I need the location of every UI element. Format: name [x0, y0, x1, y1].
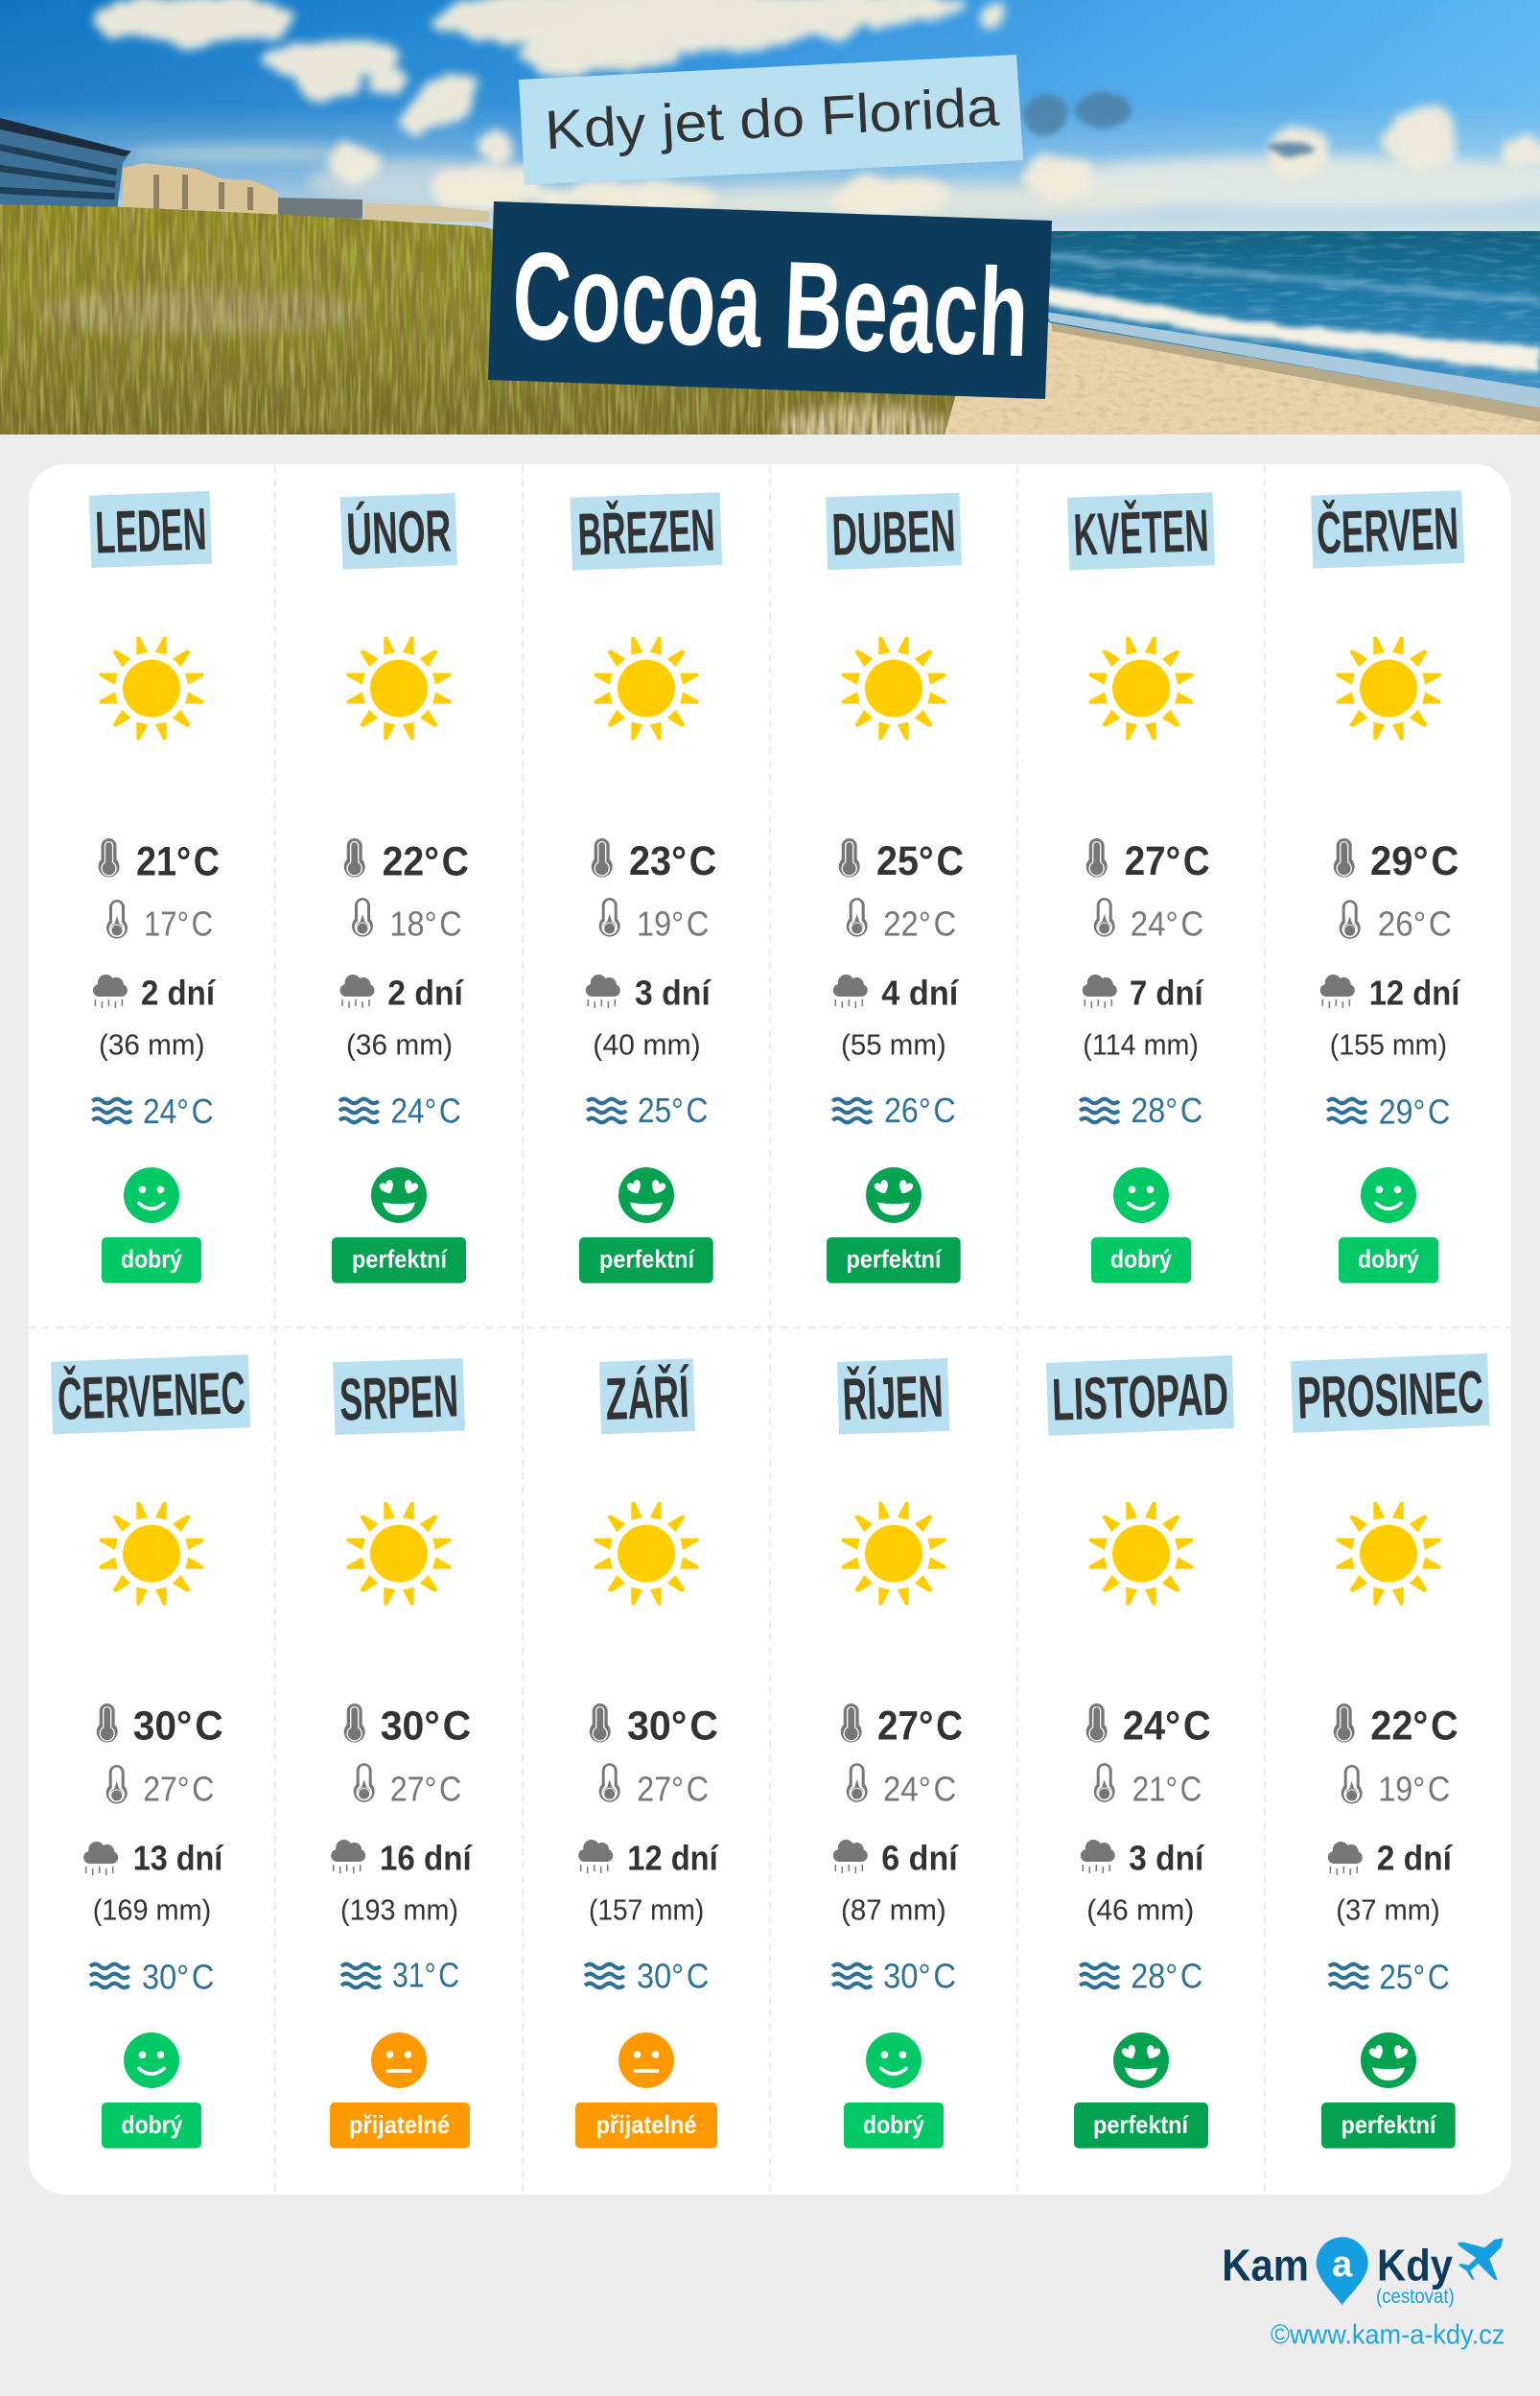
heading: zari: [599, 1358, 695, 1434]
high temperature: [1334, 1703, 1458, 1750]
month: cervenec: [51, 1354, 250, 2149]
badge: good: dobrý: [1110, 1245, 1172, 1274]
rainy days: [833, 1839, 959, 1878]
logo: Kam a Kdy: Kam: [1222, 2241, 1309, 2290]
rainy days: 13 dní: [133, 1839, 223, 1878]
rainy days: 12 dní: [1369, 973, 1460, 1013]
badge: good: [1339, 1237, 1438, 1283]
month: cerven: [1311, 490, 1464, 1283]
icon: sun: [1089, 637, 1193, 740]
water temperature: [585, 1957, 709, 1996]
rainy days: [833, 973, 959, 1013]
rainy days: [339, 973, 464, 1013]
high temperature: [592, 838, 716, 884]
heading: listopad: [1046, 1355, 1234, 1436]
icon: smiley good: [1113, 1167, 1169, 1223]
water temperature: [341, 1956, 459, 1995]
month: rijen: [832, 1358, 963, 2149]
rainfall: (36 mm): [346, 1028, 453, 1061]
rainfall: (155 mm): [1330, 1028, 1447, 1061]
high temperature: [841, 1703, 963, 1750]
high temperature: 25°C: [876, 838, 964, 884]
badge: acceptable: [575, 2102, 717, 2149]
rainfall: (87 mm): [841, 1892, 946, 1926]
month: prosinec: [1291, 1353, 1490, 2149]
icon: smiley acceptable: [618, 2032, 674, 2088]
high temperature: 30°C: [627, 1703, 718, 1750]
month: unor: [332, 493, 469, 1283]
dune grass: [0, 197, 968, 448]
icon: sun: [595, 637, 698, 740]
low temperature: 22°C: [883, 904, 956, 944]
water temperature: [832, 1957, 956, 1996]
high temperature: [344, 838, 469, 884]
icon: smiley perfect: [1113, 2032, 1169, 2088]
heading: brezen: BŘEZEN: [576, 498, 716, 569]
water temperature: [92, 1092, 213, 1131]
low temperature: 27°C: [637, 1769, 709, 1808]
water temperature: 24°C: [391, 1091, 461, 1130]
month: leden: [89, 491, 220, 1283]
high temperature: 27°C: [877, 1703, 963, 1750]
badge: acceptable: přijatelné: [596, 2110, 696, 2139]
heading: srpen: [333, 1358, 465, 1435]
rainy days: 3 dní: [635, 973, 712, 1013]
heading: rijen: [837, 1358, 949, 1435]
rainy days: 7 dní: [1130, 973, 1204, 1013]
high temperature: 22°C: [1370, 1703, 1458, 1750]
low temperature: [1340, 900, 1452, 944]
water temperature: 24°C: [143, 1092, 213, 1131]
heading: brezen: [570, 492, 722, 571]
icon: smiley acceptable: [371, 2032, 427, 2088]
low temperature: [354, 1763, 461, 1808]
icon: map pin: a: [1332, 2244, 1353, 2285]
rainfall: (40 mm): [593, 1028, 701, 1061]
title tag: Kdy jet do Florida: Kdy jet do Florida: [544, 77, 1001, 161]
rainfall: (157 mm): [589, 1892, 704, 1926]
low temperature: [352, 898, 462, 944]
icon: sun: [1337, 637, 1440, 740]
icon: sun: [595, 1502, 698, 1605]
rainy days: 4 dní: [881, 973, 959, 1013]
badge: perfect: [827, 1237, 961, 1283]
surf: [1040, 251, 1540, 372]
water temperature: [1080, 1957, 1202, 1996]
water temperature: 28°C: [1131, 1957, 1202, 1996]
heading: cervenec: ČERVENEC: [57, 1360, 246, 1433]
low temperature: [1094, 1763, 1202, 1808]
low temperature: [599, 898, 709, 944]
badge: perfect: [332, 1237, 466, 1283]
heading: cerven: [1311, 490, 1464, 569]
sand: [945, 322, 1540, 435]
rainy days: [586, 973, 712, 1013]
badge: perfect: [579, 1237, 713, 1283]
month: kveten: [1067, 492, 1215, 1283]
water temperature: 26°C: [884, 1091, 956, 1130]
heading: zari: ZÁŘÍ: [604, 1364, 691, 1433]
rainfall: (193 mm): [340, 1892, 458, 1926]
heading: duben: DUBEN: [830, 498, 957, 569]
high temperature: [1086, 838, 1210, 884]
icon: smiley good: [1361, 1167, 1416, 1223]
icon: smiley perfect: [1361, 2032, 1416, 2088]
low temperature: [599, 1763, 709, 1808]
badge: perfect: perfektní: [1093, 2110, 1189, 2139]
month: zari: [575, 1358, 719, 2149]
rainy days: [1081, 1839, 1204, 1878]
rainy days: [331, 1839, 473, 1878]
water temperature: 29°C: [1379, 1092, 1450, 1132]
low temperature: 21°C: [1132, 1769, 1202, 1808]
water temperature: [1327, 1092, 1450, 1132]
icon: smiley good: [124, 1167, 179, 1223]
high temperature: 24°C: [1123, 1703, 1211, 1750]
month: brezen: [570, 492, 722, 1283]
buildings: [0, 118, 489, 223]
icon: sun: [347, 1502, 451, 1605]
rainy days: 6 dní: [881, 1839, 959, 1878]
sea: [959, 231, 1540, 413]
icon: smiley perfect: [371, 1167, 427, 1223]
water temperature: [587, 1091, 708, 1130]
heading: unor: ÚNOR: [345, 499, 453, 568]
low temperature: [847, 898, 956, 944]
low temperature: 18°C: [389, 904, 462, 944]
low temperature: 26°C: [1378, 904, 1452, 944]
heading: cervenec: [51, 1354, 250, 1434]
high temperature: 23°C: [629, 838, 716, 884]
low temperature: 17°C: [144, 904, 213, 944]
low temperature: 27°C: [390, 1769, 461, 1808]
icon: smiley good: [866, 2032, 922, 2088]
high temperature: 27°C: [1125, 838, 1210, 884]
rainy days: [578, 1839, 719, 1878]
low temperature: 19°C: [1378, 1769, 1450, 1808]
rainy days: [93, 973, 216, 1013]
low temperature: [106, 900, 213, 944]
rainy days: [83, 1839, 223, 1878]
high temperature: [839, 838, 964, 884]
heading: unor: [340, 493, 457, 570]
water temperature: 28°C: [1131, 1091, 1202, 1130]
badge: good: dobrý: [121, 2110, 183, 2139]
rainfall: (37 mm): [1336, 1892, 1440, 1926]
rainfall: (114 mm): [1083, 1028, 1199, 1061]
badge: good: [844, 2102, 944, 2149]
heading: leden: [89, 491, 212, 568]
badge: perfect: [1321, 2102, 1456, 2149]
low temperature: [106, 1765, 214, 1808]
rainy days: 2 dní: [141, 973, 216, 1013]
heading: kveten: [1067, 492, 1215, 571]
icon: smiley perfect: [866, 1167, 922, 1223]
badge: perfect: perfektní: [599, 1245, 695, 1274]
low temperature: 27°C: [143, 1769, 214, 1808]
rainy days: 2 dní: [1377, 1839, 1453, 1878]
month: srpen: [330, 1358, 473, 2149]
title tag: Cocoa Beach: Cocoa Beach: [510, 225, 1031, 383]
water temperature: [1329, 1957, 1450, 1996]
rainfall: (55 mm): [841, 1028, 946, 1061]
rainy days: [1328, 1839, 1453, 1878]
water temperature: 30°C: [142, 1957, 214, 1996]
low temperature: 24°C: [1131, 904, 1203, 944]
rainy days: 2 dní: [387, 973, 464, 1013]
low temperature: [1342, 1765, 1450, 1808]
badge: good: dobrý: [1358, 1245, 1419, 1274]
high temperature: 22°C: [383, 838, 469, 884]
month: duben: [826, 493, 964, 1283]
icon: sun: [100, 637, 203, 740]
low temperature: 19°C: [637, 904, 709, 944]
icon: sun: [842, 637, 945, 740]
high temperature: 30°C: [381, 1703, 471, 1750]
high temperature: [1334, 838, 1458, 884]
water temperature: 31°C: [392, 1956, 459, 1995]
rainy days: 3 dní: [1129, 1839, 1204, 1878]
badge: perfect: perfektní: [352, 1245, 448, 1274]
water temperature: 30°C: [883, 1957, 956, 1996]
icon: sun: [347, 637, 451, 740]
water temperature: 25°C: [638, 1091, 708, 1130]
badge: good: dobrý: [121, 1245, 182, 1274]
heading: rijen: ŘÍJEN: [841, 1364, 945, 1433]
icon: sun: [842, 1502, 945, 1605]
icon: sun: [1089, 1502, 1193, 1605]
heading: duben: [826, 493, 962, 570]
badge: acceptable: přijatelné: [349, 2110, 450, 2139]
badge: perfect: [1074, 2102, 1208, 2149]
icon: map pin: [1317, 2237, 1368, 2305]
icon: sun: [1337, 1502, 1440, 1605]
low temperature: [1094, 898, 1203, 944]
badge: perfect: perfektní: [846, 1245, 942, 1274]
low temperature: [847, 1763, 956, 1808]
water temperature: [832, 1091, 956, 1130]
rainy days: 12 dní: [627, 1839, 719, 1878]
high temperature: [1086, 1703, 1211, 1750]
rainy days: 16 dní: [380, 1839, 473, 1878]
icon: plane: [1458, 2238, 1504, 2280]
badge: good: dobrý: [863, 2110, 924, 2139]
badge: good: [102, 1237, 201, 1283]
rainfall: (169 mm): [93, 1892, 211, 1926]
water temperature: [339, 1091, 461, 1130]
logo: Kam a Kdy: [1222, 2237, 1504, 2308]
panel: monthly climate card: [29, 464, 1511, 2195]
high temperature: 29°C: [1370, 838, 1458, 884]
high temperature: 21°C: [136, 838, 220, 884]
heading: listopad: LISTOPAD: [1051, 1361, 1229, 1434]
low temperature: 24°C: [883, 1769, 956, 1808]
icon: smiley good: [124, 2032, 179, 2088]
water temperature: [1080, 1091, 1202, 1130]
month: listopad: [1046, 1355, 1234, 2149]
badge: acceptable: [330, 2102, 470, 2149]
icon: sun: [100, 1502, 203, 1605]
hero photo: beach: [0, 0, 1540, 448]
rainy days: [1320, 973, 1460, 1013]
heading: kveten: KVĚTEN: [1072, 498, 1210, 569]
badge: good: [1091, 1237, 1191, 1283]
high temperature: 30°C: [133, 1703, 223, 1750]
logo: Kam a Kdy: Kdy: [1377, 2241, 1453, 2290]
water temperature: [90, 1957, 214, 1996]
water temperature: 30°C: [637, 1957, 709, 1996]
high temperature: [98, 838, 220, 884]
heading: srpen: SRPEN: [338, 1363, 459, 1434]
water temperature: 25°C: [1379, 1957, 1450, 1996]
badge: good: [102, 2102, 201, 2149]
title tag: Cocoa Beach: [488, 201, 1052, 399]
website url: ©www.kam-a-kdy.cz: [1271, 2319, 1505, 2350]
rainy days: [1083, 973, 1204, 1013]
rainfall: (36 mm): [99, 1028, 205, 1061]
title tag: Kdy jet do Florida: [519, 55, 1023, 185]
heading: leden: LEDEN: [94, 497, 208, 567]
icon: smiley perfect: [618, 1167, 674, 1223]
badge: perfect: perfektní: [1341, 2110, 1436, 2139]
rainfall: (46 mm): [1086, 1892, 1194, 1926]
logo: Kam a Kdy: (cestovat): [1376, 2286, 1455, 2308]
